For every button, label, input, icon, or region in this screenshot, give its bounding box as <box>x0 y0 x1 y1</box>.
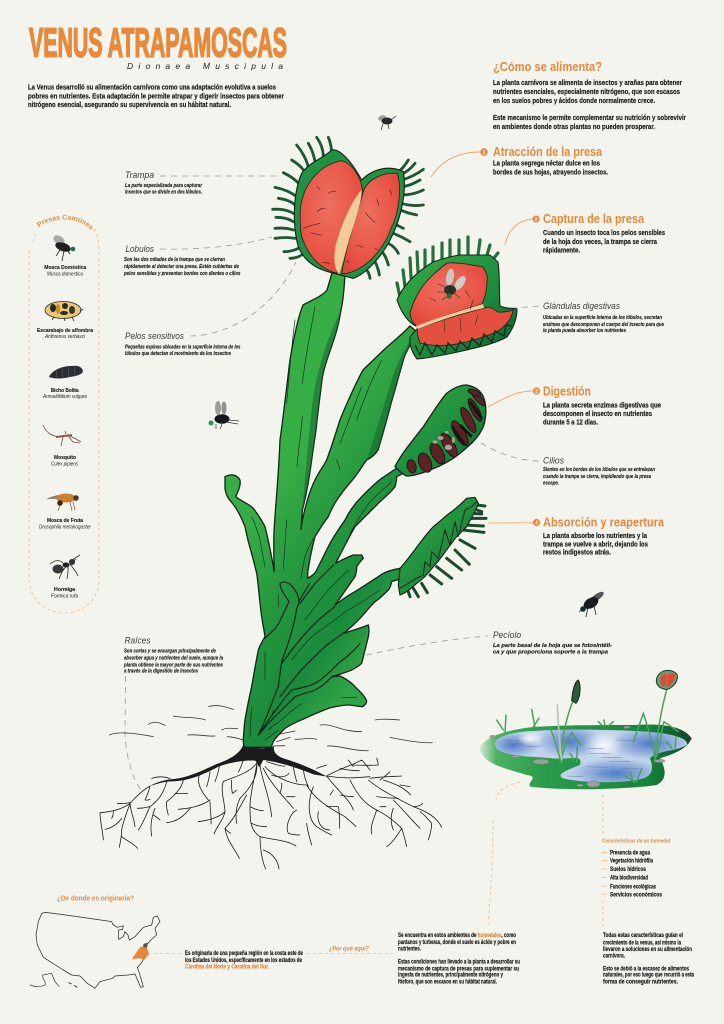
step 1: atraccion: bordes de sus hojas, atrayendo insectos. <box>493 170 608 176</box>
hormiga label: Formica rufa <box>51 594 78 600</box>
label: peciolo: La parte basal de la hoja que se fotosintéti- <box>493 643 612 649</box>
label: pelos sensitivos <box>125 262 296 357</box>
trap 1: open upper trap <box>273 137 423 278</box>
step 3: digestion: 3 <box>535 389 538 395</box>
mosquito label <box>51 455 78 468</box>
label: cilios: escape. <box>543 480 559 486</box>
panel: caracteristicas del humedal: Funciones ecológicas <box>610 884 656 890</box>
step 1: atraccion: 1 <box>482 150 486 156</box>
step 2: captura: Captura de la presa <box>543 211 645 226</box>
trap 2 marks <box>430 290 478 332</box>
panel: caracteristicas del humedal: Presencia de agua <box>610 850 650 856</box>
pond stones <box>490 726 665 787</box>
label: raices <box>123 636 223 792</box>
label: cilios: Cilios <box>543 456 564 466</box>
panel: como se alimenta: Este mecanismo le permite complementar su nutrición y sobrevivir <box>493 115 686 122</box>
label: lobulos <box>123 237 272 277</box>
hormiga label <box>51 587 78 600</box>
label: glandulas digestivas <box>500 301 664 334</box>
mosca de fruta label <box>39 518 91 530</box>
step 4: absorcion: 4 <box>535 520 539 526</box>
label: trampa: Trampa <box>125 170 154 181</box>
leaves silhouette <box>225 273 417 747</box>
text: conclusion: carnívora. <box>603 954 625 960</box>
pond reeds <box>497 690 678 782</box>
label: lobulos: Lobulos <box>126 244 154 255</box>
label: trampa: La parte especializada para capturar <box>125 183 203 189</box>
escarabajo label: Escarabajo de alfombra <box>37 328 94 334</box>
pond connectors <box>488 782 603 930</box>
pond cattail <box>572 680 580 703</box>
pond water <box>495 730 687 782</box>
mosca de fruta label: Mosca de Fruta <box>47 518 84 524</box>
label: peciolo: Pecíolo <box>493 630 521 641</box>
step 2: captura: de la hoja dos veces, la trampa se cierra <box>543 239 657 246</box>
panel: como se alimenta: en los suelos pobres y ácidos donde normalmente crece. <box>493 98 655 105</box>
trap 2: closing trap with fly <box>397 237 517 359</box>
highlighted states <box>132 947 149 960</box>
icon: hormiga <box>50 555 80 579</box>
trapped fly <box>437 268 468 300</box>
step 4: absorcion <box>488 514 665 556</box>
step 3: digestion <box>488 384 661 426</box>
escarabajo label: Anthrenus verbasci <box>44 334 86 340</box>
label: peciolo <box>366 630 612 656</box>
heading: por que aqui: ¿Por qué aquí? <box>329 946 370 952</box>
step 1: atraccion <box>431 144 608 177</box>
label: cilios <box>481 443 655 486</box>
label: pelos sensitivos: Pequeñas espinas ubicadas en la superficie interna de los <box>125 344 240 350</box>
label: trampa <box>125 170 280 196</box>
panel: como se alimenta: ¿Cómo se alimenta? <box>493 59 602 74</box>
icon: free fly top <box>377 114 396 130</box>
step 2: captura: 2 <box>534 217 538 223</box>
label: glandulas digestivas: la planta pueda absorber los nutrientes <box>543 328 626 334</box>
trap 3: closed digesting trap <box>395 385 487 476</box>
title <box>29 20 287 71</box>
label: raices: a través de la digestión de insectos <box>124 668 198 674</box>
label: glandulas digestivas: Ubicadas en la superficie interna de los lóbulos, secretan <box>543 315 662 321</box>
label: cilios: cuando la trampa se cierra, impidiendo que la presa <box>543 474 651 480</box>
roots <box>100 706 442 869</box>
panel: caracteristicas del humedal: Servicios económicos <box>610 892 663 898</box>
label: pelos sensitivos: Pelos sensitivos <box>125 331 184 342</box>
trap 2 upper red lobe <box>410 263 487 327</box>
trap 1 right red lobe <box>342 173 400 274</box>
intro text: pobres en nutrientes. Esta adaptación le permite atrapar y digerir insectos para obtener <box>28 94 284 100</box>
panel: caracteristicas del humedal <box>602 838 670 898</box>
plant <box>100 137 517 869</box>
connector: origin <box>148 952 393 954</box>
label: pelos sensitivos: lóbulos que detectan el movimiento de los insectos <box>125 351 231 357</box>
pond illustration <box>479 670 693 789</box>
text: origin <box>185 951 303 970</box>
trap 4: reopening trap <box>398 497 486 597</box>
text: por que aqui <box>398 933 520 986</box>
bicho bolita label: Bicho Bolita <box>51 388 80 394</box>
bicho bolita label: Armadillidium vulgare <box>42 394 87 400</box>
trap 2 center band <box>416 304 484 329</box>
text: conclusion: naturales, por eso luego que recurrió a esta <box>603 972 694 978</box>
label: peciolo: ca y que proporciona soporte a la trampa <box>493 650 608 656</box>
map: united states <box>30 912 160 988</box>
trap 1 teeth <box>273 137 423 278</box>
mosca de fruta label: Drosophila melanogaster <box>39 524 91 530</box>
text: conclusion: forma de conseguir nutrientes. <box>603 980 678 986</box>
icon: mosquito <box>43 425 81 446</box>
label: trampa: insectos que se divide en dos lóbulos. <box>125 190 202 196</box>
hormiga label: Hormiga <box>54 587 76 593</box>
text: por que aqui: nutrientes. <box>398 946 421 952</box>
step 4: absorcion: restos indigestos atrás. <box>543 550 611 556</box>
trap 1 center band <box>334 190 362 274</box>
panel: caracteristicas del humedal: Alta biodiversidad <box>610 876 648 882</box>
panel: caracteristicas del humedal: Suelos hídricos <box>610 867 647 873</box>
trap 2 lower red lobe <box>417 307 513 345</box>
text: por que aqui: pantanos y turberas, donde el suelo es ácido y pobre en <box>398 940 516 946</box>
icon: escarabajo <box>45 302 83 321</box>
label: raices: absorber agua y nutrientes del suelo, aunque la <box>124 656 223 662</box>
trap 2 green body <box>397 255 517 359</box>
trap 1 left red lobe <box>300 161 363 273</box>
mosquito label: Culex pipiens <box>51 462 78 468</box>
intro text <box>28 84 284 109</box>
step 3: digestion: durante 5 a 12 días. <box>543 420 598 426</box>
panel: como se alimenta: La planta carnívora se alimenta de insectos y arañas para obtener <box>493 80 682 87</box>
step 2: captura <box>505 211 665 254</box>
label: raices: Son cortas y se encargan principalmente de <box>124 648 216 654</box>
panel: como se alimenta <box>493 59 686 131</box>
label: lobulos: pelos sensibles y presentan bordes con dientes o cilios <box>123 271 240 277</box>
title: Dionaea Muscipula <box>127 61 283 71</box>
step 4: absorcion: Absorción y reapertura <box>543 514 665 530</box>
label: cilios: Sientes en los bordes de los lóbulos que se entrelazan <box>543 467 655 473</box>
icon: mosca domestica <box>52 234 75 261</box>
panel: como se alimenta: en ambientes donde otras plantas no pueden prosperar. <box>493 124 655 131</box>
bicho bolita label <box>42 388 87 400</box>
digestive chambers <box>406 387 487 474</box>
text: origin: Carolina del Norte y Carolina del Sur. <box>185 964 269 970</box>
label: raices: Raíces <box>124 636 151 646</box>
step 1: atraccion: La planta segrega néctar dulce en los <box>493 160 600 168</box>
mosquito label: Mosquito <box>54 455 77 461</box>
step 3: digestion: La planta secreta enzimas digestivas que <box>543 402 661 410</box>
leaf veins <box>250 307 392 740</box>
pond green bank <box>479 724 692 789</box>
escarabajo label <box>37 328 94 340</box>
trap 1 surface marks <box>303 187 392 264</box>
panel: como se alimenta: nutrientes esenciales, especialmente nitrógeno, que son escasos <box>493 89 680 96</box>
surface soil lines <box>109 706 432 751</box>
mosca domestica label <box>44 265 87 278</box>
label: glandulas digestivas: Glándulas digestivas <box>543 301 620 312</box>
leaf dividers <box>258 565 360 735</box>
text: origin: Es originaria de una pequeña región en la costa este de <box>185 951 303 957</box>
text: por que aqui: ingesta de nutrientes, principalmente nitrógeno y <box>398 972 503 978</box>
mosca domestica label: Mosca Doméstica <box>44 265 87 271</box>
text: conclusion: Esto se debió a la escasez de alimentos <box>603 966 689 972</box>
intro text: nitrógeno esencial, asegurando su supervivencia en su hábitat natural. <box>28 102 231 109</box>
text: por que aqui: fósforo, que son escasos en su hábitat natural. <box>398 980 497 986</box>
text: por que aqui: mecanismo de captura de presas para suplementar su <box>398 966 519 972</box>
text: conclusion: crecimiento de la venus, así mismo la <box>603 940 681 946</box>
panel: presas comunes <box>28 214 100 614</box>
trap 1 green body <box>294 150 404 278</box>
step 1: atraccion: Atracción de la presa <box>493 144 603 159</box>
text: conclusion: llevaron a soluciones en su alimentación <box>603 947 692 953</box>
label: glandulas digestivas: enzimas que descomponen el cuerpo del insecto para que <box>543 322 664 328</box>
text: por que aqui: Se encuentra en estos ambientes de humedales, como <box>398 933 516 939</box>
pond mini trap <box>656 670 677 689</box>
step 2: captura: rápidamente. <box>543 248 580 254</box>
trap 2 lower zigzag teeth <box>415 325 512 355</box>
intro text: La Venus desarrolló su alimentación carnívora como una adaptación evolutiva a suelos <box>28 84 276 92</box>
trap 2 teeth <box>397 237 498 297</box>
icon: bicho bolita <box>49 366 83 378</box>
label: lobulos: Son las dos mitades de la trampa que se cierran <box>124 257 225 263</box>
heading: origin: ¿De donde es originaria? <box>57 896 134 902</box>
step 4: absorcion: trampa se vuelve a abrir, dejando los <box>543 542 648 548</box>
step 4: absorcion: La planta absorbe los nutrientes y la <box>543 533 647 540</box>
label: lobulos: rápidamente al detectar una presa. Están cubiertas de <box>124 264 239 270</box>
title: VENUS ATRAPAMOSCAS <box>29 20 287 66</box>
mosca domestica label: Musca domestica <box>47 272 83 278</box>
panel: caracteristicas del humedal: Características de un humedal <box>602 838 670 844</box>
sidebar heading: Presas Comúnes <box>36 214 93 230</box>
icon: free fly middle <box>208 401 239 429</box>
icon: mosca de fruta <box>46 494 79 511</box>
icon: free fly right <box>579 590 605 617</box>
text: conclusion <box>603 933 694 986</box>
step 2: captura: Cuando un insecto toca los pelos sensibles <box>543 230 665 237</box>
text: por que aqui: Estas condiciones han llevado a la planta a desarrollar su <box>398 960 520 966</box>
water ripples <box>505 740 670 777</box>
text: conclusion: Todas estas características guían el <box>603 933 683 939</box>
step 3: digestion: descomponen el insecto en nutrientes <box>543 411 652 418</box>
text: origin: los Estados Unidos, específicamente en los estados de <box>185 958 302 964</box>
panel: caracteristicas del humedal: Vegetación hidrófila <box>610 858 653 864</box>
step 3: digestion: Digestión <box>543 384 591 398</box>
label: raices: planta obtiene la mayor parte de sus nutrientes <box>123 662 223 668</box>
shading on upper leaves <box>302 310 417 510</box>
